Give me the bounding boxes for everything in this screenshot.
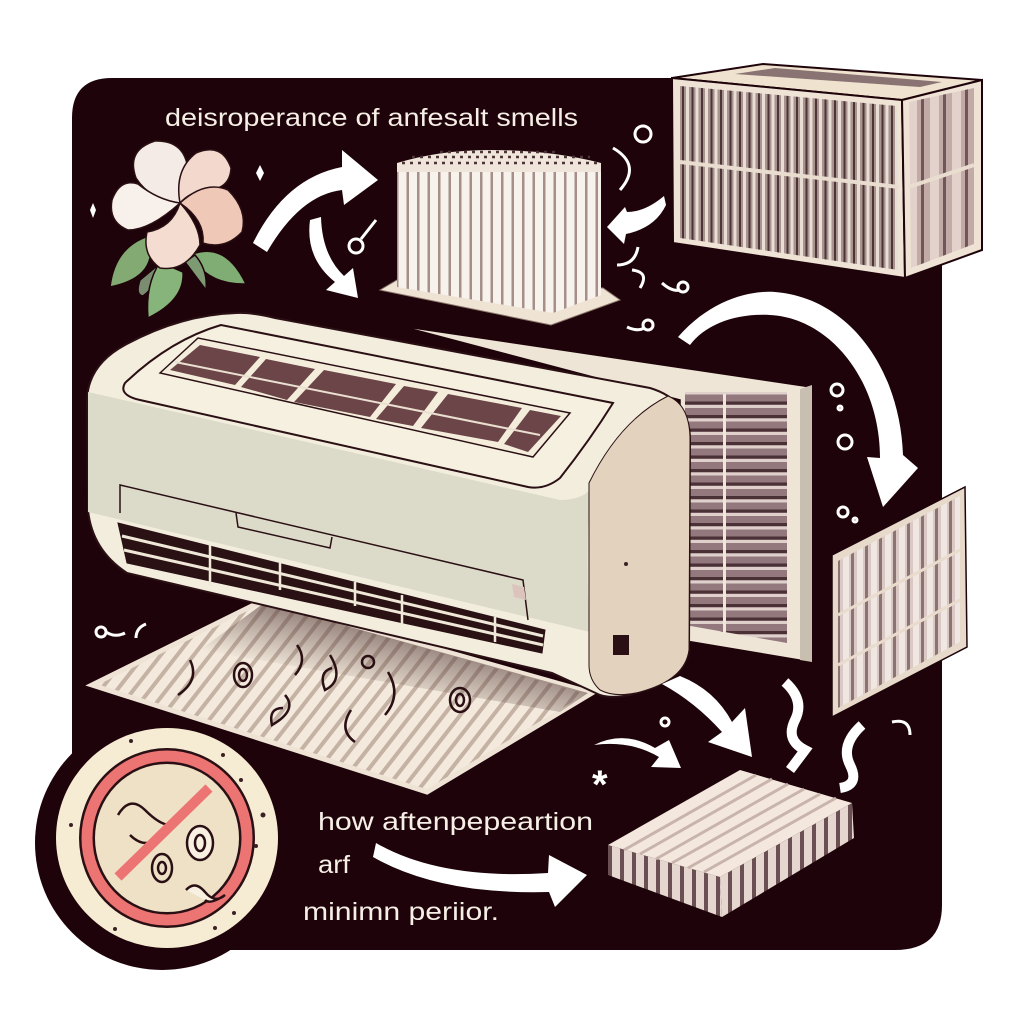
heading: bottom: minimn periior.	[303, 898, 499, 926]
flower leaves	[110, 235, 246, 318]
icon: air conditioner	[87, 313, 690, 697]
icon: large filter top right	[672, 64, 982, 278]
pad top	[608, 770, 852, 877]
filter swirls	[178, 645, 470, 742]
arrow: curved right	[678, 292, 918, 507]
arrow: flower to filter	[253, 150, 378, 252]
icon: flat filter under unit	[92, 600, 592, 792]
arrow: left to filter	[607, 196, 666, 244]
small swirl icons	[96, 126, 910, 735]
pad sides	[608, 845, 722, 917]
unit body	[87, 313, 690, 697]
front face	[88, 392, 590, 632]
icon: back grille panel	[400, 326, 812, 662]
front vents	[118, 523, 545, 653]
icon: pleated filter pad	[608, 770, 854, 917]
unit details	[613, 562, 629, 655]
box side	[902, 80, 982, 278]
arrow: small bottom	[594, 738, 681, 768]
grille	[685, 392, 787, 643]
icon: flower	[110, 141, 246, 318]
arrow: bottom to filter	[373, 843, 587, 907]
box top	[672, 64, 982, 100]
box front	[672, 78, 905, 278]
background panel	[35, 78, 942, 970]
icon: wavy odor lines	[785, 682, 862, 788]
heading: top: deisroperance of anfesalt smells	[165, 104, 578, 132]
icon: asterisk: *	[592, 763, 608, 807]
heading: bottom: arf	[318, 851, 350, 879]
front flap lines	[120, 485, 528, 620]
side panel	[589, 396, 690, 695]
heading: bottom	[303, 808, 593, 926]
arrow: filter down	[309, 217, 358, 298]
icon: angled filter right	[832, 487, 967, 717]
icon: sparkles	[90, 165, 264, 218]
filter tray	[380, 280, 620, 325]
odor swirls	[118, 804, 225, 902]
disc dots	[69, 739, 266, 931]
icon: no-smell sign	[56, 728, 278, 948]
heading: bottom: how aftenpepeartion	[318, 808, 593, 836]
top vents	[160, 338, 570, 457]
filter pleats	[397, 167, 601, 313]
prohibition slash	[118, 788, 209, 877]
filter speckled top	[397, 150, 601, 172]
arrow: down to pad	[662, 676, 752, 757]
icon: pleated filter top	[380, 150, 620, 325]
flower petals	[111, 141, 243, 269]
top panel	[123, 325, 613, 488]
